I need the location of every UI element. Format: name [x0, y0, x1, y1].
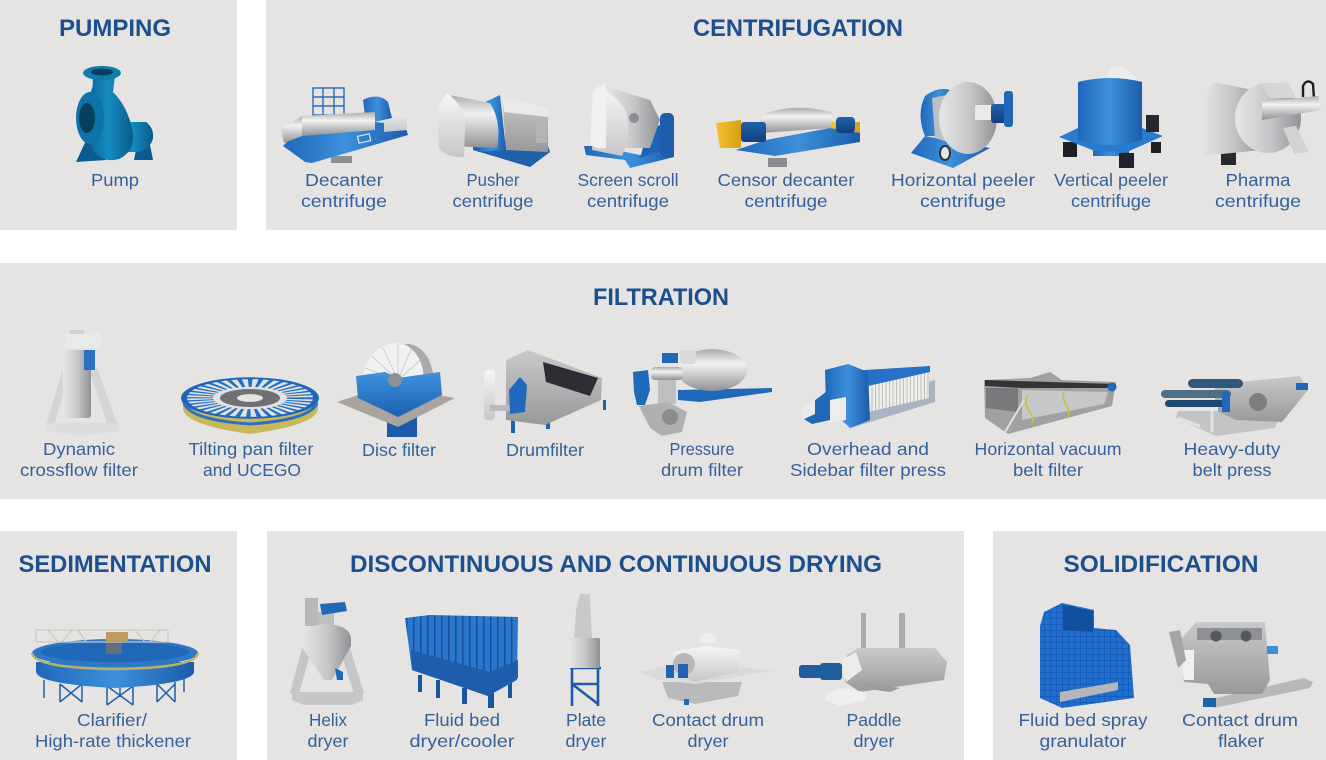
label: pressure drum filter: Pressure — [670, 439, 734, 459]
label: contact drum dryer — [652, 710, 764, 751]
label: contact drum dryer: dryer — [688, 731, 729, 751]
heading: filtration: FILTRATION — [593, 284, 729, 311]
panel: centrifugation — [266, 0, 1326, 230]
label: contact drum flaker: flaker — [1218, 731, 1264, 751]
icon: tilting pan filter — [183, 378, 318, 434]
label: fluid bed spray granulator: granulator — [1040, 731, 1127, 751]
label: clarifier / high-rate thickener: Clarifier/ — [77, 710, 147, 730]
icon: plate dryer — [569, 594, 601, 706]
icon: pharma centrifuge — [1199, 81, 1321, 165]
label: fluid bed spray granulator — [1018, 710, 1148, 751]
label: screen scroll centrifuge: Screen scroll — [578, 170, 678, 190]
label: overhead and sidebar filter press: Sidebar filter press — [790, 460, 946, 480]
label: pharma centrifuge: Pharma — [1226, 170, 1291, 190]
label: contact drum flaker — [1182, 710, 1298, 751]
label: decanter centrifuge: centrifuge — [301, 191, 387, 211]
panel: solidification — [993, 531, 1326, 760]
label: pharma centrifuge — [1215, 170, 1301, 211]
label: heavy-duty belt press — [1184, 439, 1281, 480]
label: dynamic crossflow filter: Dynamic — [43, 439, 115, 459]
icon: helix dryer — [290, 598, 364, 705]
label: fluid bed dryer/cooler: dryer/cooler — [410, 731, 515, 751]
icon: fluid bed dryer — [405, 615, 518, 708]
icon: decanter centrifuge — [281, 88, 408, 163]
label: pharma centrifuge: centrifuge — [1215, 191, 1301, 211]
label: horizontal vacuum belt filter: Horizontal vacuum — [974, 439, 1122, 459]
label: pusher centrifuge: Pusher — [466, 170, 520, 190]
icon: drumfilter — [484, 350, 606, 433]
icon: paddle dryer — [799, 613, 947, 706]
label: plate dryer — [566, 710, 607, 751]
heading: pumping: PUMPING — [59, 15, 171, 42]
label: censor decanter: centrifuge — [744, 191, 828, 211]
icon: disc filter — [337, 343, 455, 437]
label: decanter centrifuge — [301, 170, 387, 211]
icon: horizontal peeler centrifuge — [911, 82, 1013, 168]
panel: sedimentation — [0, 531, 237, 760]
label: fluid bed dryer/cooler: Fluid bed — [424, 710, 500, 730]
label: plate dryer: dryer — [566, 731, 607, 751]
label: screen scroll centrifuge — [578, 170, 678, 211]
label: tilting pan filter — [188, 439, 314, 480]
label: pusher centrifuge: centrifuge — [452, 191, 534, 211]
label: disc filter: Disc filter — [362, 440, 436, 460]
label: fluid bed spray granulator: Fluid bed spray — [1018, 710, 1148, 730]
heading: centrifugation: CENTRIFUGATION — [693, 15, 903, 42]
icon: overhead and sidebar filter press — [802, 364, 935, 428]
label: horizontal peeler centrifuge: Horizontal peeler — [891, 170, 1035, 190]
label: pump: Pump — [91, 170, 139, 190]
icon: contact drum flaker — [1169, 622, 1313, 708]
label: horizontal vacuum belt filter: belt filter — [1013, 460, 1083, 480]
label: tilting pan filter: Tilting pan filter — [188, 439, 314, 459]
label: clarifier / high-rate thickener — [35, 710, 191, 751]
label: horizontal vacuum belt filter — [974, 439, 1122, 480]
icon: pressure drum filter — [633, 349, 772, 436]
label: screen scroll centrifuge: centrifuge — [587, 191, 669, 211]
panel: pumping — [0, 0, 237, 230]
icon: contact drum dryer — [639, 633, 776, 705]
label: plate dryer: Plate — [566, 710, 606, 730]
heading: sedimentation: SEDIMENTATION — [18, 551, 212, 578]
label: censor decanter — [718, 170, 855, 211]
icon: vertical peeler centrifuge — [1059, 65, 1163, 168]
heading: drying: DISCONTINUOUS AND CONTINUOUS DRYING — [350, 551, 882, 578]
icon: horizontal vacuum belt filter — [984, 372, 1116, 434]
label: helix dryer: dryer — [308, 731, 349, 751]
label: pressure drum filter — [661, 439, 743, 480]
label: vertical peeler centrifuge: Vertical peeler — [1054, 170, 1168, 190]
label: fluid bed dryer/cooler — [410, 710, 515, 751]
label: pusher centrifuge — [452, 170, 534, 211]
icon: heavy-duty belt press — [1161, 376, 1308, 436]
icon: clarifier — [32, 630, 198, 705]
panel: filtration — [0, 263, 1326, 499]
label: paddle dryer: dryer — [854, 731, 895, 751]
label: paddle dryer — [846, 710, 902, 751]
label: decanter centrifuge: Decanter — [305, 170, 383, 190]
icon: censor decanter — [716, 108, 860, 167]
label: dynamic crossflow filter: crossflow filter — [20, 460, 138, 480]
icon: fluid bed spray granulator — [1040, 603, 1134, 708]
label: pressure drum filter: drum filter — [661, 460, 743, 480]
label: overhead and sidebar filter press — [790, 439, 946, 480]
label: helix dryer — [308, 710, 349, 751]
panel: discontinuous and continuous drying — [267, 531, 964, 760]
label: censor decanter: Censor decanter — [718, 170, 855, 190]
label: tilting pan filter: and UCEGO — [203, 460, 301, 480]
label: heavy-duty belt press: belt press — [1192, 460, 1272, 480]
label: horizontal peeler centrifuge: centrifuge — [920, 191, 1006, 211]
label: horizontal peeler centrifuge — [891, 170, 1035, 211]
label: helix dryer: Helix — [309, 710, 347, 730]
label: vertical peeler centrifuge: centrifuge — [1071, 191, 1151, 211]
label: dynamic crossflow filter — [20, 439, 138, 480]
label: contact drum flaker: Contact drum — [1182, 710, 1298, 730]
label: paddle dryer: Paddle — [846, 710, 902, 730]
label: overhead and sidebar filter press: Overhead and — [807, 439, 929, 459]
label: clarifier / high-rate thickener: High-rate thickener — [35, 731, 191, 751]
icon: screen scroll centrifuge — [584, 83, 674, 168]
icon: pusher centrifuge — [437, 93, 550, 167]
icon: pump — [76, 66, 153, 162]
label: vertical peeler centrifuge — [1054, 170, 1168, 211]
heading: solidification: SOLIDIFICATION — [1064, 551, 1258, 578]
icon: dynamic crossflow filter — [46, 330, 118, 436]
label: drumfilter: Drumfilter — [506, 440, 584, 460]
label: contact drum dryer: Contact drum — [652, 710, 764, 730]
label: heavy-duty belt press: Heavy-duty — [1184, 439, 1281, 459]
